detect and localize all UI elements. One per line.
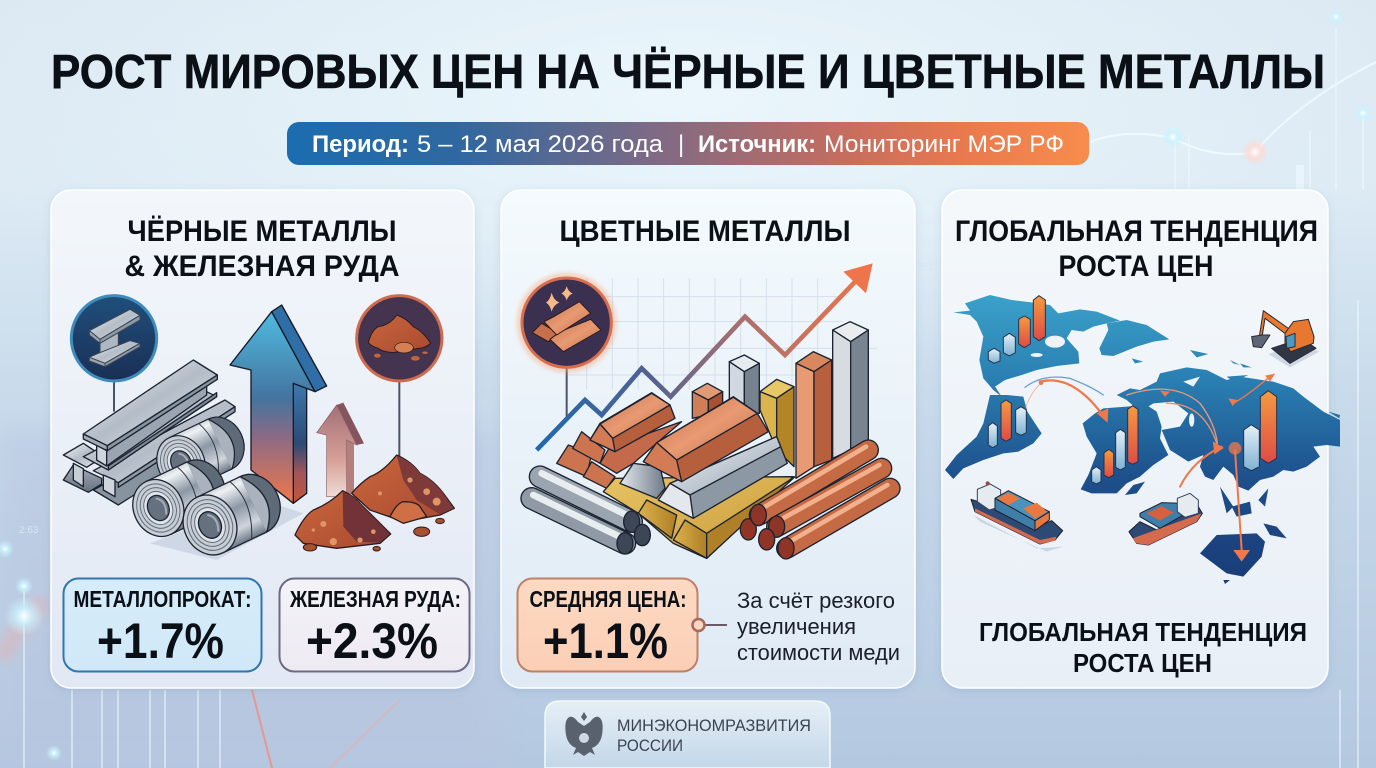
- stat: average price: +1.1%: [543, 613, 668, 669]
- callout connector: [692, 619, 727, 631]
- bottom caption: РОСТА ЦЕН: [1073, 648, 1212, 678]
- small up arrow: [317, 403, 364, 497]
- icon: emblem: [565, 712, 603, 756]
- callout text: [737, 588, 900, 665]
- copper pipes: [757, 447, 890, 548]
- stat: iron ore: ЖЕЛЕЗНАЯ РУДА:: [289, 586, 461, 612]
- panel: global trend: [942, 190, 1340, 688]
- period and source pill: |: [678, 131, 684, 158]
- stat: rolled steel: МЕТАЛЛОПРОКАТ:: [74, 586, 252, 612]
- icon: I-beam: [71, 296, 157, 381]
- background: 2.63: [19, 525, 39, 536]
- ministry name: МИНЭКОНОМРАЗВИТИЯ: [617, 716, 811, 735]
- icon: copper ingots: [517, 273, 617, 373]
- steel coil upper: [148, 409, 253, 498]
- stat: iron ore: +2.3%: [306, 613, 438, 669]
- price bars on the map: [988, 296, 1277, 484]
- illustration: ingots, bars, pipes and growth line: [517, 263, 890, 559]
- period and source pill: [287, 122, 1089, 165]
- period and source pill: Период:: [312, 131, 409, 158]
- continents: [945, 295, 1340, 584]
- excavator: [1252, 311, 1319, 367]
- stat: rolled steel: [64, 578, 262, 672]
- steel coil front: [173, 466, 290, 564]
- metal bars: [692, 322, 868, 478]
- ministry name: [617, 716, 811, 755]
- heading: black metals: [124, 215, 400, 283]
- callout text: За счёт резкого: [737, 588, 895, 613]
- heading: global trend: [955, 215, 1318, 283]
- period and source pill: Источник:: [698, 131, 816, 158]
- heading: global trend: РОСТА ЦЕН: [1058, 250, 1214, 283]
- steel beams: [63, 360, 235, 505]
- aluminium pipes: [532, 473, 633, 543]
- big up arrow: [230, 305, 327, 503]
- bottom caption: ГЛОБАЛЬНАЯ ТЕНДЕНЦИЯ: [979, 617, 1307, 647]
- cargo ship right: [1129, 493, 1202, 545]
- heading: black metals: & ЖЕЛЕЗНАЯ РУДА: [124, 250, 400, 283]
- panel: black metals: [51, 190, 474, 688]
- icon: ore: [357, 296, 442, 381]
- stat: iron ore: [280, 578, 470, 672]
- heading: global trend: ГЛОБАЛЬНАЯ ТЕНДЕНЦИЯ: [955, 215, 1318, 248]
- bottom caption: [979, 617, 1307, 678]
- illustration: steel, coils, arrows and ore: [63, 296, 454, 564]
- iron ore piles: [295, 455, 454, 548]
- background: 251: [917, 262, 934, 273]
- period and source pill: Мониторинг МЭР РФ: [824, 131, 1064, 158]
- callout text: стоимости меди: [737, 640, 900, 665]
- world map illustration: [945, 295, 1340, 584]
- heading: non-ferrous metals: ЦВЕТНЫЕ МЕТАЛЛЫ: [560, 215, 850, 248]
- coil stack shadow: [150, 500, 303, 560]
- cargo ship left: [971, 481, 1063, 552]
- metal ingots: [557, 393, 795, 558]
- stat: rolled steel: +1.7%: [97, 613, 224, 669]
- heading: black metals: ЧЁРНЫЕ МЕТАЛЛЫ: [128, 215, 396, 248]
- stat: average price: [518, 578, 698, 672]
- growth line with arrow: [537, 263, 873, 450]
- ministry name: РОССИИ: [617, 736, 683, 755]
- stat: average price: СРЕДНЯЯ ЦЕНА:: [530, 586, 686, 612]
- trade arrows: [1025, 375, 1272, 550]
- footer: ministry badge: [545, 701, 830, 768]
- period and source pill: 5 – 12 мая 2026 года: [417, 131, 664, 158]
- steel coil left: [124, 452, 234, 545]
- callout text: увеличения: [737, 614, 856, 639]
- panel: non-ferrous metals: [501, 190, 915, 688]
